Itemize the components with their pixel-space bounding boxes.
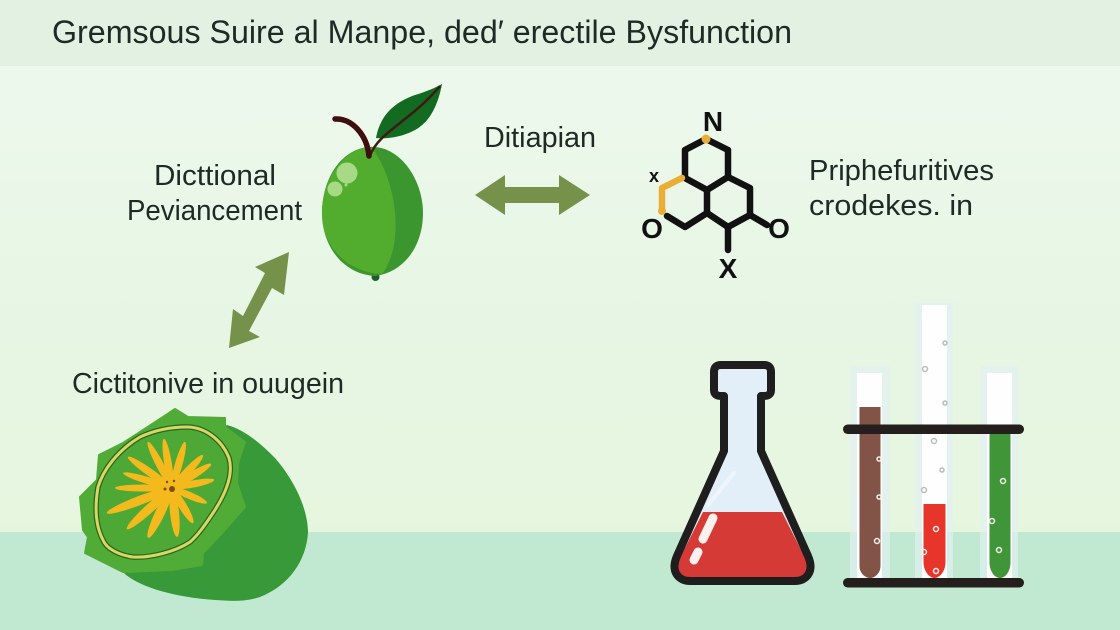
label: dictional bbox=[127, 160, 302, 227]
label: priphefuritives bbox=[809, 155, 994, 222]
label: dictional: Dicttional bbox=[154, 160, 276, 192]
icon: molecule diagram bbox=[641, 106, 790, 284]
label: priphefuritives: Priphefuritives bbox=[809, 155, 994, 187]
arrow: double horizontal bbox=[475, 175, 590, 215]
arrow: double diagonal bbox=[229, 252, 289, 348]
icon: molecule diagram: O bbox=[641, 213, 663, 244]
label: ditiapian: Ditiapian bbox=[484, 122, 596, 154]
label: cictitonive: Cictitonive in ouugein bbox=[72, 368, 344, 400]
icon: molecule diagram: X bbox=[719, 253, 738, 284]
red tube liquid bbox=[924, 504, 946, 578]
icon: green fruit with leaf bbox=[322, 84, 442, 281]
icon: test tube rack bbox=[843, 303, 1024, 588]
icon: molecule diagram: O bbox=[768, 213, 790, 244]
label: dictional: Peviancement bbox=[127, 195, 302, 227]
icon: molecule diagram: x bbox=[649, 166, 659, 186]
icon: molecule diagram: N bbox=[703, 106, 723, 137]
brown tube liquid bbox=[860, 407, 880, 578]
header band bbox=[0, 0, 1120, 66]
label: priphefuritives: crodekes. in bbox=[809, 190, 973, 222]
title: Gremsous Suire al Manpe, ded′ erectile Bysfunction bbox=[52, 14, 792, 50]
green tube liquid bbox=[990, 430, 1010, 578]
icon: conical flask with red liquid bbox=[675, 365, 810, 581]
icon: kiwi-like cut fruit bbox=[80, 409, 308, 601]
